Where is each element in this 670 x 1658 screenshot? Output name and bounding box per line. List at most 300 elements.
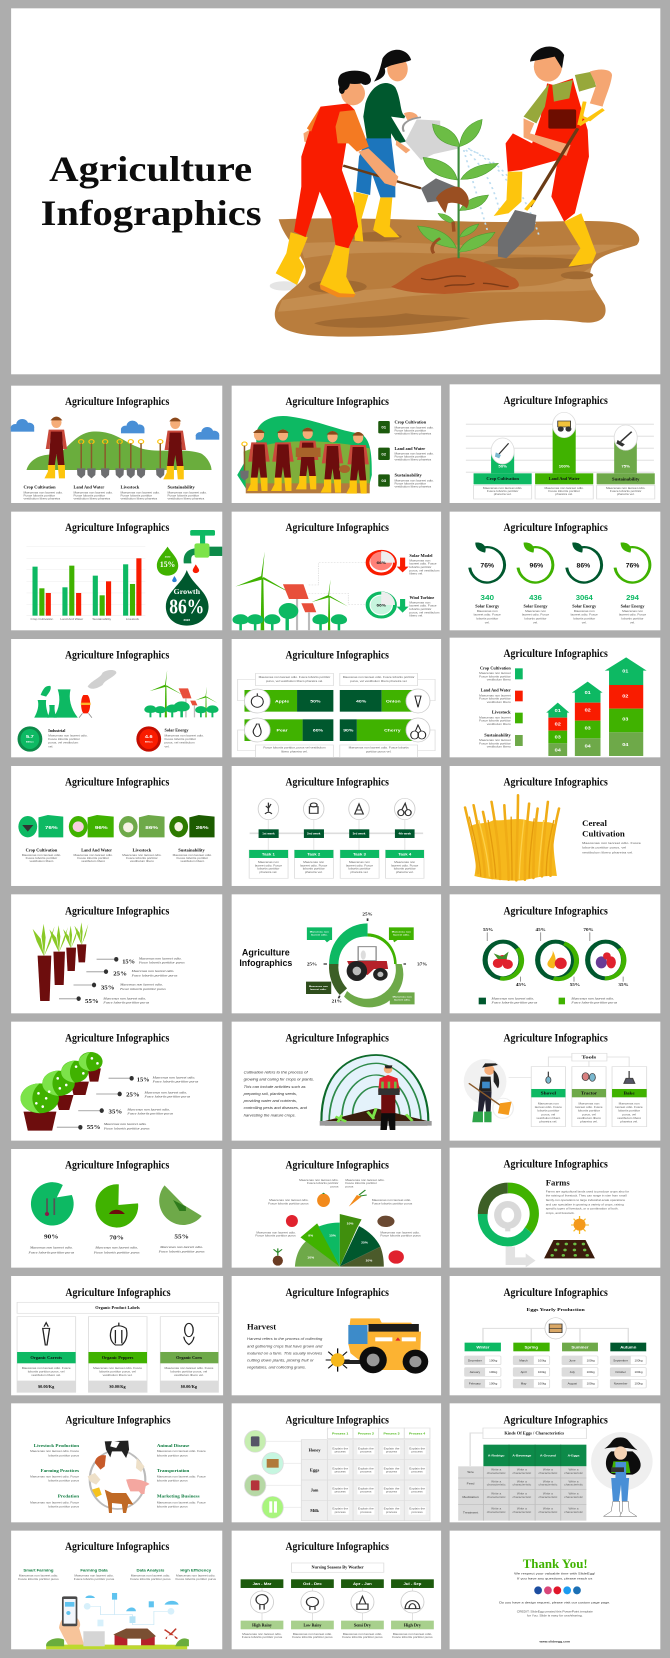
slide 17: greenhouse (232, 1022, 441, 1141)
illustration: wheat (465, 795, 559, 881)
tall arrow stack: 01 (622, 669, 629, 674)
labelled cards: Crop Cultivation (486, 477, 520, 481)
pie charts (31, 1182, 202, 1228)
vegetables (273, 1190, 404, 1266)
captions: Wind Turbine (409, 595, 434, 600)
small arrow stack: 03 (555, 735, 561, 740)
percent values: 90% (44, 1234, 59, 1240)
labels: Maecenas non laoreet odio. (74, 491, 113, 494)
captions: Fusce lobortis porttitor (26, 856, 57, 860)
right column: lobortis porttitor purus (157, 1505, 188, 1509)
illustration: wind turbines, panels and trees (232, 552, 348, 630)
table body: characteristic (564, 1483, 584, 1487)
product cards: vestibulum libero vel. (174, 1373, 204, 1377)
table: Process 1 (332, 1432, 349, 1436)
captions: lobortis porttitor (622, 617, 644, 620)
icon: tractor (347, 947, 388, 981)
percent rows: Fusce lobortis porttitor purus (138, 961, 185, 965)
captions: Maecenas non laoreet odio. (159, 1245, 203, 1249)
season headers: Summer (571, 1346, 589, 1350)
captions (242, 1632, 433, 1639)
percent labels (307, 912, 427, 1004)
task cards: Task 1 (262, 853, 276, 856)
tool cards: Maecenas non (578, 1102, 600, 1105)
captions: lobortis porttitor (573, 617, 595, 620)
column headings: Smart Farming (23, 1569, 54, 1572)
percent labels: 55% (483, 928, 493, 932)
illustration: hand with phone (59, 1596, 85, 1650)
fan chart: 15% (329, 1234, 336, 1238)
product cards: Organic Peppers (102, 1355, 134, 1360)
month cells: December (468, 1359, 482, 1362)
slide 2: farming team (232, 386, 441, 503)
table: Process 2 (358, 1432, 374, 1436)
labelled cards (474, 473, 655, 499)
green header row: A-Eggs (568, 1454, 580, 1458)
icon: faucet and drops: 86% (169, 596, 204, 619)
captions: Maecenas non laoreet odio. (372, 1198, 411, 1202)
small arrow stack (546, 703, 569, 756)
legend list: Fusce lobortis porttitor (479, 675, 511, 678)
captions: Maecenas non laoreet odio. (343, 1632, 382, 1636)
fan chart: 10% (307, 1256, 314, 1260)
month cells: April (521, 1370, 527, 1374)
captions: Fusce lobortis porttitor purus (158, 1250, 205, 1254)
captions: laoreet odio. Fusce (571, 613, 598, 616)
captions: Fusce lobortis porttitor (345, 1181, 377, 1185)
strip: row 3 and row 4 slides (11, 638, 660, 886)
fan chart: 25% (361, 1241, 368, 1244)
captions (474, 604, 647, 624)
legend list: vestibulum libero (487, 678, 511, 682)
captions: Maecenas non laoreet odio. (293, 1632, 332, 1636)
labels: Fusce lobortis porttitor (24, 494, 55, 497)
message (514, 1572, 595, 1581)
captions: Fusce lobortis porttitor purus (255, 1234, 296, 1238)
captions: Maecenas non (622, 609, 643, 613)
labelled cards: Maecenas non laoreet odio. (483, 486, 523, 490)
percent rows: Fusce lobortis porttitor purus (103, 1127, 150, 1130)
table: Explain the (332, 1487, 349, 1490)
product cards: lobortis porttitor purus, vel (99, 1370, 136, 1373)
heading: Thank You! (523, 1558, 588, 1571)
green header row: A-Ground (540, 1454, 556, 1458)
captions (22, 848, 212, 863)
captions: purus, vel vestibulum (48, 741, 79, 745)
percent rows: Maecenas non laoreet odio. (143, 1091, 187, 1094)
icon: faucet and drops: 15% (160, 560, 175, 570)
captions: Fusce lobortis porttitor purus (372, 1202, 413, 1205)
title: Agriculture Infographics (503, 1413, 608, 1426)
tool cards: purus, vel (582, 1113, 596, 1116)
month cells: 100kg (634, 1359, 643, 1362)
timeline: 1st week (262, 832, 275, 836)
percent labels: 35% (618, 983, 629, 987)
percent rows (59, 957, 185, 1005)
column headings: Fusce lobortis porttitor purus (130, 1577, 171, 1581)
slide 13: planters percent (11, 894, 222, 1013)
slide 11: timeline (232, 766, 441, 886)
legend list: Livestock (492, 710, 511, 715)
website: www.slideegg.com (538, 1640, 570, 1643)
product cards: lobortis porttitor purus, vel (28, 1370, 65, 1373)
table body: Treatment (463, 1511, 478, 1515)
labelled cards: Fusce lobortis porttitor (610, 489, 642, 493)
product ovals (244, 1430, 301, 1518)
percent labels: 45% (536, 928, 546, 932)
illustration: young plant (418, 119, 498, 258)
captions: vel. (582, 621, 587, 624)
slide 18: tools (450, 1022, 660, 1141)
captions: Solar Energy (475, 604, 500, 608)
captions: Fusce lobortis porttitor purus (268, 1202, 309, 1205)
percent rows: Fusce lobortis porttitor purus (143, 1095, 191, 1099)
month cells: 100kg (587, 1382, 595, 1386)
title: Agriculture Infographics (65, 395, 169, 408)
box texts: purus, vel vestibulum libero pharetra vel. (266, 679, 323, 683)
table body: Size (467, 1470, 474, 1474)
tool cards: Shovel (541, 1091, 557, 1096)
captions: Fusce lobortis porttitor purus (392, 1635, 433, 1639)
table: process (386, 1470, 398, 1474)
table body: characteristic (539, 1510, 558, 1514)
text block: matured on a farm. This usually involves (247, 1352, 322, 1355)
medium arrow stack: 03 (585, 726, 591, 731)
stat numbers: 340 (480, 593, 494, 602)
column headings: Maecenas non laoreet odio. (19, 1574, 58, 1578)
table body: characteristic (564, 1495, 584, 1499)
bar chart: Land And Water (60, 617, 83, 621)
percent rows (57, 1076, 199, 1131)
captions (48, 728, 204, 748)
text block: Harvest (247, 1322, 277, 1331)
connector tree (483, 1328, 628, 1343)
table: process (412, 1510, 423, 1514)
table body (458, 1466, 586, 1521)
percent labels: 37% (417, 962, 427, 967)
left column: Predation (58, 1494, 80, 1499)
timeline (250, 798, 423, 850)
labels: Sustainability (168, 485, 196, 490)
month cells: 100kg (634, 1370, 643, 1374)
farm text: Farms are agricultural lands used to produce crops also for (546, 1190, 629, 1193)
tool cards: lobortis porttitor (578, 1109, 600, 1113)
captions: lobortis porttitor (409, 607, 431, 611)
illustration: renewable (144, 670, 219, 717)
numbered list: 01 (381, 426, 387, 430)
speech tags (306, 927, 415, 1004)
captions: Maecenas non laoreet odio. (269, 1198, 309, 1202)
table body: Write a (569, 1480, 579, 1483)
column headings: Maecenas non laoreet odio. (74, 1574, 114, 1578)
fruit bars (244, 690, 420, 741)
table: process (335, 1450, 346, 1454)
title: Agriculture Infographics (65, 775, 169, 788)
percent values: 55% (174, 1234, 189, 1240)
table body: characteristic (564, 1471, 584, 1475)
right column: Marketing Business (157, 1494, 200, 1499)
text block: and gathering crops that have grown and (247, 1345, 323, 1348)
table: Explain the (358, 1447, 374, 1450)
labels: Maecenas non laoreet odio. (121, 491, 160, 494)
box texts: Fusce lobortis porttitor, purus vel vestibulum (263, 746, 326, 750)
task cards: Task 4 (398, 853, 412, 856)
box texts: purus, vel vestibulum libero pharetra vel. (350, 679, 408, 683)
table: Jam (311, 1488, 319, 1492)
season tags: Jan - Mar (253, 1582, 272, 1586)
month cells: March (519, 1359, 528, 1362)
box texts: porttitor purus vel. (366, 750, 392, 753)
bar chart: 100% (559, 465, 570, 468)
percent labels (483, 928, 629, 987)
title: Agriculture Infographics (65, 1286, 171, 1299)
illustration: combine harvester (326, 1318, 428, 1374)
legend: Fusce lobortis porttitor purus (490, 1001, 538, 1005)
percent rows: Maecenas non laoreet odio. (138, 957, 182, 960)
left column: lobortis porttitor purus (48, 1454, 80, 1457)
table: Explain the (409, 1447, 425, 1450)
illustration: gardener (378, 1065, 400, 1130)
title: Agriculture Infographics (503, 775, 608, 788)
header box (291, 1563, 384, 1572)
weather tags: High Rainy (252, 1623, 273, 1627)
farm text: the raising of livestock. They can range in size from small (546, 1194, 627, 1198)
column headings: Maecenas non laoreet odio. (176, 1574, 216, 1578)
legend list: vestibulum libero (487, 700, 511, 704)
connector lines (509, 1057, 629, 1077)
numbered list: Crop Cultivation (394, 420, 427, 425)
percent labels: 25% (362, 912, 373, 917)
text block: Harvest refers to the process of collecting (247, 1337, 323, 1341)
slide 19: notched pies (11, 1149, 222, 1268)
credit: CREDIT: SlideEgg created this PowerPoint template (517, 1610, 593, 1613)
text block: preparing soil, planting seeds, (243, 1092, 297, 1096)
product cards: $0.00/Kg (109, 1384, 127, 1389)
captions: laoreet odio. Fusce (409, 604, 437, 608)
percentages (480, 562, 640, 569)
donut: solar model: 66% (377, 561, 386, 565)
table body: characteristic (487, 1471, 506, 1475)
table body: Write a (569, 1468, 579, 1472)
strip: row 1 and row 2 slides (11, 384, 660, 630)
tool cards: Maecenas non (619, 1102, 640, 1105)
legend list: Sustainability (484, 733, 512, 737)
table: Explain the (358, 1467, 374, 1470)
title: Agriculture Infographics (286, 521, 389, 534)
slide 27: kinds of eggs table (450, 1403, 660, 1522)
header box: Nursing Seasons By Weather (312, 1565, 364, 1570)
farm text: and can specialize in growing a variety of crops, raising (546, 1203, 624, 1206)
product cards: vestibulum libero vel. (31, 1373, 61, 1377)
weather tags: Low Rainy (303, 1623, 322, 1627)
captions: laoreet odio. Fusce (474, 613, 501, 616)
season tags: Jul - Sep (404, 1582, 422, 1586)
badge: industrial (18, 726, 42, 752)
labels: Land And Water (74, 485, 104, 490)
season headers: Winter (476, 1346, 490, 1350)
rings (470, 547, 650, 583)
captions: Fusce lobortis porttitor (77, 856, 109, 860)
table: Process 3 (383, 1432, 400, 1436)
percent rows: Fusce lobortis porttitor purus (151, 1080, 199, 1084)
season tags (241, 1579, 434, 1588)
heading (239, 948, 292, 969)
header box (17, 1302, 219, 1313)
table body: Feed (467, 1482, 475, 1486)
captions: purus, vel vestibulum (165, 741, 195, 745)
labels: Fusce lobortis porttitor (121, 494, 152, 497)
numbered list: vestibulum libero pharetra (394, 432, 432, 435)
month cells: 100kg (538, 1370, 547, 1374)
table body: characteristic (512, 1471, 532, 1475)
illustration: connected icons (84, 1593, 179, 1626)
slide 6: progress rings (450, 512, 660, 630)
illustration: farm team (237, 416, 372, 494)
tool cards: purus, vel (541, 1113, 556, 1116)
percent rows: Maecenas non laoreet odio. (119, 983, 163, 987)
medium arrow stack (572, 682, 603, 756)
captions: Solar Energy (524, 604, 548, 608)
illustration: watering can (403, 117, 459, 160)
percent rows: Maecenas non laoreet odio. (103, 1122, 147, 1126)
icon: faucet and drops: 2023 (183, 618, 191, 622)
captions: Maecenas non laoreet odio. (122, 853, 162, 857)
hero title: Agriculture (49, 149, 252, 189)
title: Agriculture Infographics (503, 1031, 608, 1044)
month cells: May (521, 1382, 527, 1386)
captions: Maecenas non laoreet odio. (48, 734, 88, 737)
title: Agriculture Infographics (65, 648, 169, 661)
labels: vestibulum libero pharetra (24, 497, 61, 500)
table body: characteristic (487, 1495, 506, 1499)
fan chart: 9% (308, 1234, 313, 1238)
month cells: September (613, 1359, 628, 1362)
illustration: planters (33, 922, 88, 1001)
slide 14: tractor donut (232, 894, 441, 1013)
product cards: Organic Corn (176, 1355, 202, 1360)
numbered list: vestibulum libero pharetra (394, 485, 432, 488)
column headings: High Efficiency (180, 1569, 212, 1572)
captions: laoreet odio. Fusce (619, 613, 647, 616)
title: Agriculture Infographics (286, 1286, 389, 1299)
icon: seed field (544, 1240, 595, 1258)
numbered list: Fusce lobortis porttitor (394, 429, 426, 432)
percent labels: 45% (516, 983, 526, 987)
captions: Fusce lobortis porttitor purus (93, 1251, 140, 1254)
slide 8: fruit bars (232, 639, 441, 757)
fruit icons (493, 949, 616, 969)
leaves on rings (475, 543, 631, 553)
tool cards: pharetra vel. (620, 1120, 638, 1124)
captions: libero vel. (409, 614, 423, 618)
illustration: hills, clouds, farmers, shovels (11, 417, 219, 479)
illustration: greenhouse (320, 1055, 432, 1126)
text block: growing and caring for crops or plants. (244, 1077, 314, 1082)
medium arrow stack: 04 (585, 744, 591, 749)
month cells: January (470, 1370, 481, 1374)
month cells: November (614, 1382, 628, 1386)
numbered list: Fusce lobortis porttitor (394, 482, 426, 485)
season headers: Autumn (620, 1346, 637, 1350)
slide 29: nursing seasons (232, 1531, 441, 1649)
season tags: Oct - Dec (303, 1582, 323, 1586)
fruit bars: Onion (386, 699, 401, 704)
percent rows: 25% (126, 1092, 140, 1098)
text block: vegetables, and collecting grains. (247, 1366, 306, 1370)
percent rows: Fusce lobortis porttitor purus (126, 1112, 174, 1116)
illustration: water spray (464, 148, 539, 237)
strip: row 5 and row 6 slides (11, 894, 660, 1141)
speech tags: Maecenas non (392, 931, 411, 934)
table: Honey (309, 1448, 321, 1452)
captions: laoreet odio. Fusce (522, 613, 550, 616)
slide 3: rising bars (450, 384, 660, 503)
table: Explain the (384, 1467, 400, 1470)
subtitle: Eggs Yearly Production (527, 1308, 586, 1312)
keyhole graphic (494, 1201, 521, 1231)
text block (243, 1070, 314, 1117)
month cells: 100kg (489, 1382, 498, 1386)
captions: Maecenas non (409, 601, 431, 604)
table: Explain the (332, 1447, 349, 1450)
captions: Solar Energy (572, 604, 597, 608)
table body: Write a (491, 1468, 502, 1472)
icon: faucet and drops: Growth (174, 587, 200, 596)
percent labels: 25% (307, 962, 317, 967)
month cells: June (569, 1359, 576, 1362)
left column: Farming Practices (41, 1469, 79, 1473)
right column: Transportation (157, 1469, 190, 1473)
speech tags: laoreet odio. (311, 934, 328, 937)
task cards: pharetra vel. (351, 870, 369, 874)
captions: Maecenas non (525, 609, 546, 613)
captions: lobortis porttitor (476, 617, 498, 620)
percent values (44, 1234, 189, 1241)
captions: lobortis porttitor (525, 617, 547, 620)
product cards: lobortis porttitor purus, vel (171, 1370, 208, 1373)
tool cards (531, 1067, 647, 1127)
task cards: pharetra vel. (260, 870, 277, 874)
percent rows: 55% (85, 999, 99, 1005)
text block: Cereal (582, 819, 607, 829)
right column: Maecenas non laoreet odio. Fusce (157, 1501, 206, 1504)
table body: Write a (517, 1468, 527, 1472)
captions: Maecenas non laoreet odio. (29, 1246, 73, 1250)
connector lines (309, 563, 365, 604)
table: Explain the (358, 1487, 374, 1490)
text block: lobortis porttitor purus, vel (582, 846, 626, 850)
table: Process 4 (409, 1432, 426, 1436)
arrow (506, 1247, 536, 1267)
percent labels: 55% (570, 983, 580, 987)
illustration: bushes (21, 1052, 103, 1131)
medium arrow stack: 02 (585, 708, 591, 713)
captions (27, 1245, 205, 1254)
slide 21: farms (450, 1148, 660, 1268)
month cells: July (570, 1370, 576, 1374)
social icons (534, 1586, 581, 1594)
labelled cards: Sustainability (612, 477, 640, 481)
table body: Write a (543, 1492, 553, 1496)
task cards: Maecenas non (303, 860, 325, 864)
percent rows: Fusce lobortis porttitor purus (131, 974, 178, 977)
farm text (546, 1178, 629, 1215)
title: Agriculture Infographics (503, 394, 608, 407)
captions: Maecenas non laoreet odio. (173, 853, 212, 857)
speech tags: laoreet odio. (393, 934, 410, 937)
captions: Fusce lobortis porttitor (48, 737, 80, 741)
percent values: 70% (109, 1235, 124, 1241)
